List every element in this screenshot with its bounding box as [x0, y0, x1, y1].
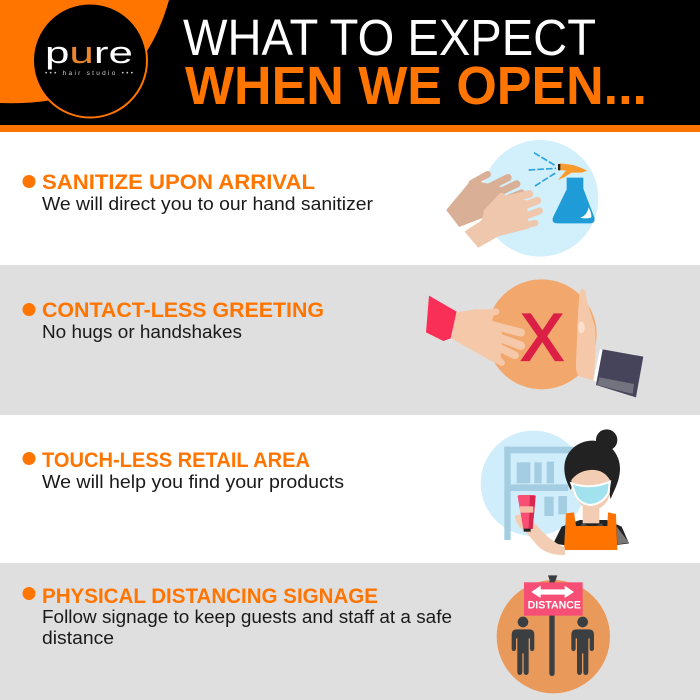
- item: physical distancing signage: distance: [42, 628, 114, 648]
- logo: [33, 4, 147, 118]
- title: [183, 9, 647, 116]
- panel: grey band contact-less greeting: [0, 265, 700, 415]
- item: physical distancing signage: PHYSICAL DISTANCING SIGNAGE: [42, 585, 378, 608]
- icon: hands refusing handshake: [426, 279, 643, 397]
- panel: grey band physical distancing: [0, 563, 700, 700]
- logo: ••• hair studio •••: [45, 70, 134, 77]
- item: sanitize upon arrival: We will direct you to our hand sanitizer: [42, 194, 373, 214]
- icon: distance sign and two figures: DISTANCE: [528, 599, 581, 611]
- item: physical distancing signage: Follow signage to keep guests and staff at a safe: [42, 607, 452, 627]
- item: sanitize upon arrival: SANITIZE UPON ARRIVAL: [42, 171, 315, 194]
- title: WHAT TO EXPECT: [183, 9, 596, 66]
- item: touch-less retail area: We will help you find your products: [42, 472, 344, 492]
- item: contact-less greeting: CONTACT-LESS GREETING: [42, 299, 324, 322]
- item: touch-less retail area: TOUCH-LESS RETAIL AREA: [42, 449, 310, 472]
- icon: masked retail assistant: [481, 429, 629, 555]
- item: touch-less retail area: [22, 449, 344, 492]
- header band: [0, 0, 700, 132]
- item: contact-less greeting: [22, 299, 324, 342]
- icon: distance sign and two figures: [497, 575, 610, 693]
- item: physical distancing signage: [22, 585, 452, 648]
- title: WHEN WE OPEN...: [185, 57, 647, 116]
- icon: hands refusing handshake: X: [521, 300, 563, 374]
- item: contact-less greeting: No hugs or handshakes: [42, 322, 242, 342]
- item: sanitize upon arrival: [22, 171, 373, 214]
- logo: pure: [45, 35, 133, 70]
- icon: hands and spray bottle: [447, 140, 598, 257]
